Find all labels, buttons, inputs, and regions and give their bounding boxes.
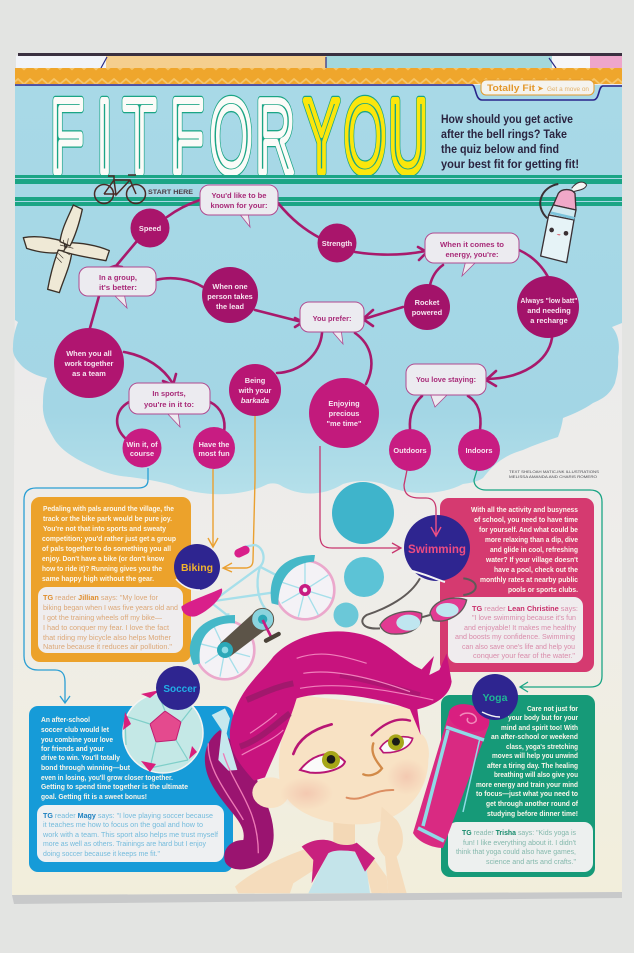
yoga body text: get through another round of [486,799,579,808]
girl arms and shirt [235,820,388,893]
yoga body text: to focus—just what you need to [476,789,579,798]
bottom page shadow [12,892,622,904]
node: win it [122,428,162,468]
soccer quote box: more as well as others. Trainings are hard but I enjoy [43,841,206,848]
illustration: girl [205,631,452,893]
node: strength [318,224,356,262]
bubble: energy [425,233,519,276]
panel: biking [31,497,191,662]
biking body text [42,504,177,583]
node: outdoors: Outdoors [393,446,427,455]
navy rule and tab: Totally Fit [487,83,536,94]
swimming body text: and glide in cool, refreshing [490,545,578,554]
node: win it: Win it, of [126,440,158,449]
girl ear [252,777,289,808]
biking quote box: Nature because it reduces air pollution." [43,644,173,651]
swimming quote box: "I love swimming because it's fun [472,615,576,622]
girl face [279,695,429,824]
biking quote box [38,587,183,653]
biking body text: enjoy. Don't have a bike (or don't know [42,554,164,563]
yoga quote box: think that yoga could also have games, [456,849,576,856]
biking quote box: I got the training wheels off my bike— [43,615,162,622]
biking quote box: I had to conquer my fear. I love the fact [43,625,169,632]
title: YOU: YOU [304,78,428,195]
girl ponytail [205,730,274,869]
yoga quote box: fun! I like everything about it. I didn't [463,840,576,847]
node: indoors [458,429,500,471]
illustration: goggles [362,578,476,634]
bubble: you prefer: You prefer: [313,314,351,323]
biking body text: same happy high without the gear. [42,574,154,583]
node: low batt [517,276,579,338]
yoga body text: class, yoga's stretching [506,742,578,751]
bubble: in a group [79,267,156,308]
yoga body text: after a tiring day. The healing [487,761,578,770]
node: low batt: a recharge [530,316,568,325]
swimming quote box: and boosts my confidence. Swimming [455,634,575,641]
node: outdoors [389,429,431,471]
bubble: known for: You'd like to be [212,191,266,200]
bubble: you love staying: You love staying: [416,375,476,384]
intro text [441,114,579,171]
node: have fun: most fun [198,449,230,458]
yoga body text: breathing will also give you [494,770,578,779]
biking body text: competition; you'd rather just get a group [42,534,177,543]
yoga body text: an after-school or weekend [491,732,578,741]
node: indoors: Indoors [465,446,493,455]
girl eyebrows, nose and mouth [293,720,410,799]
biking quote box: TG reader Jillian says: "My love for [43,595,159,602]
node: one person leads: the lead [216,302,244,311]
soccer quote box: TG reader Magy says: "I love playing soccer because [43,813,213,820]
node: win it: course [130,449,154,458]
swimming body text: pools or sports clubs. [508,585,578,594]
pink route arrow: me time to swimming [320,446,401,553]
soccer body text: for friends and your [41,744,104,753]
girl hair [230,631,452,781]
blue quiz panel with cloud edge [13,85,622,494]
swimming body text: With all the activity and busyness [471,505,578,514]
navy rule and tab [15,80,622,100]
icon: bicycle start [94,175,146,204]
node: work together [54,328,124,398]
node: low batt: Always "low batt" [520,296,578,305]
intro text: How should you get active [441,114,573,126]
navy rule and tab: ➤ [537,84,544,93]
bubble: you love staying [406,364,486,407]
yoga quote box: science and arts and crafts." [486,859,577,866]
credits: TEXT SHELOAH MATIC-INK ILLUSTRATIONS [509,470,600,474]
soccer body text: you combine your love [41,735,113,744]
label: soccer: Soccer [163,684,197,695]
yoga body text: studying before dinner time! [487,809,578,818]
node: rocket powered: Rocket [415,298,440,307]
biking body text: of pals together to do something you all [42,544,171,553]
panel: swimming [440,498,594,672]
icon: stacked hands [23,205,109,293]
yoga body text: your body but for your [508,713,578,722]
node: barkada: barkada [241,396,269,405]
node: rocket powered: powered [412,308,443,317]
label: biking: Biking [181,562,213,574]
bubble: known for: known for your: [210,201,268,210]
bubble: known for [200,185,278,227]
soccer quote box: it teaches me how to focus on the goal and how to [43,822,203,829]
panel: yoga [441,695,595,877]
swimming quote box [448,597,583,663]
girl hair ribbon [212,708,237,771]
credits [509,470,600,479]
label: yoga: Yoga [483,692,508,704]
node: me time: Enjoying [328,399,360,408]
node: work together: When you all [66,349,112,358]
icon: water bottle [540,182,587,263]
bubble: in a group: In a group, [99,273,137,282]
yoga body text: mind and spirit too! With [501,723,578,732]
stacked page edge strip [16,53,622,69]
node: have fun [193,427,235,469]
girl hair shading [208,654,433,853]
biking body text: how to ride it)? Running gives you the [42,564,162,573]
swimming body text [471,505,579,594]
intro text: your best fit for getting fit! [441,159,579,171]
node: barkada [229,364,281,416]
label: swimming [404,515,470,582]
illustration: soccer ball [123,690,203,773]
start here label: START HERE [148,189,193,196]
orange route arrow: barkada to biking [223,416,255,572]
girl blush [280,758,427,810]
swimming quote box: TG reader Lean Christine says: [472,606,578,613]
soccer quote box: doing soccer because it keeps me fit." [43,851,160,858]
intro text: after the bell rings? Take [441,129,567,141]
yoga body text: more energy and train your mind [476,780,578,789]
bubble: in sports: In sports, [152,389,186,398]
node: speed: Speed [139,224,162,233]
swimming body text: water? If your village doesn't [485,555,579,564]
chevron band [15,68,622,84]
yoga body text: moves will help you unwind [492,751,578,760]
swimming quote box: and enjoyable! It makes me healthy [464,625,577,632]
bubble: energy: When it comes to [440,240,505,249]
navy rule and tab: Get a move on [547,86,589,93]
green route arrow: indoors to yoga [474,470,602,692]
node: me time: "me time" [327,419,362,428]
title: FIT FOR: FIT FOR [51,78,295,195]
biking quote box: biking began when I was five years old and [43,605,178,612]
swimming body text: of school, you need to have time [474,515,578,524]
soccer body text: soccer club would let [41,725,110,734]
title: YOU: YOU [304,78,428,195]
label: biking [174,544,220,590]
decorative water circles [332,482,394,628]
swimming quote box: conquer your fear of the water." [473,653,576,660]
soccer quote box: work with a team. This sport also helps me trust myself [42,832,218,839]
node: work together: as a team [72,369,106,378]
biking body text: track or the bike park would be pure joy. [43,514,172,523]
soccer body text: Getting to spend time together is the ultimate [41,782,188,791]
node: one person leads: person takes [207,292,253,301]
pink route arrow: outdoors to swimming [404,470,441,536]
biking body text: You're not that into sports and sweaty [43,524,166,533]
title: FIT FOR: FIT FOR [51,78,295,195]
swimming body text: have a pool, check out the [494,565,578,574]
bubble: energy: energy, you're: [446,250,498,259]
quiz connector paths [90,200,552,438]
intro text: the quiz below and find [441,144,559,156]
soccer body text: even in losing, you'll grow closer together. [41,773,173,782]
biking quote box: that riding my bicycle also helps Mother [43,635,172,642]
illustration: bicycle [181,544,334,679]
node: one person leads: When one [212,282,248,291]
yoga quote box [448,822,593,872]
bubble: in sports [129,383,210,427]
bubble: in a group: it's better: [99,283,137,292]
swimming body text: for yourself. And what could be [479,525,578,534]
node: rocket powered [404,284,450,330]
yoga quote box: TG reader Trisha says: "Kids yoga is [462,830,576,837]
node: one person leads [202,267,258,323]
node: strength: Strength [322,239,353,248]
soccer body text [41,715,188,801]
girl hand [378,807,407,893]
swimming quote box: can also save one's life and help you [462,644,575,651]
soccer quote box [37,805,224,862]
orange route arrow: have fun to biking [208,469,218,547]
blue route arrow to soccer [24,468,148,703]
node: barkada: Being [245,376,266,385]
bubble: in sports: you're in it to: [144,400,194,409]
label: swimming: Swimming [408,544,466,556]
soccer body text: goal. Getting fit is a sweet bonus! [41,792,147,801]
node: have fun: Have the [199,440,229,449]
soccer body text: drive to win. You'll totally [41,753,120,762]
panel: soccer [29,706,233,872]
credits: MELISSA AMANDA AND CHARIS ROMERO [509,475,597,479]
label: soccer [156,666,200,710]
green stripes [15,175,622,206]
soccer body text: bond through winning—but [41,763,131,772]
bubble: you prefer [300,302,364,344]
node: speed [130,208,170,248]
node: work together: work together [64,359,114,368]
yoga body text: Care not just for [527,704,578,713]
node: me time: precious [329,409,359,418]
swimming body text: monthly rates at nearby public [480,575,578,584]
node: me time [309,378,379,448]
node: low batt: and needing [527,306,571,315]
soccer body text: An after-school [41,715,90,724]
illustration: yoga mat [413,699,493,848]
label: yoga [472,674,518,720]
node: barkada: with your [238,386,272,395]
yoga body text [476,704,579,818]
girl eyes [300,734,413,773]
biking body text: Pedaling with pals around the village, the [43,504,174,513]
swimming body text: more relaxing than a dip, dive [485,535,578,544]
